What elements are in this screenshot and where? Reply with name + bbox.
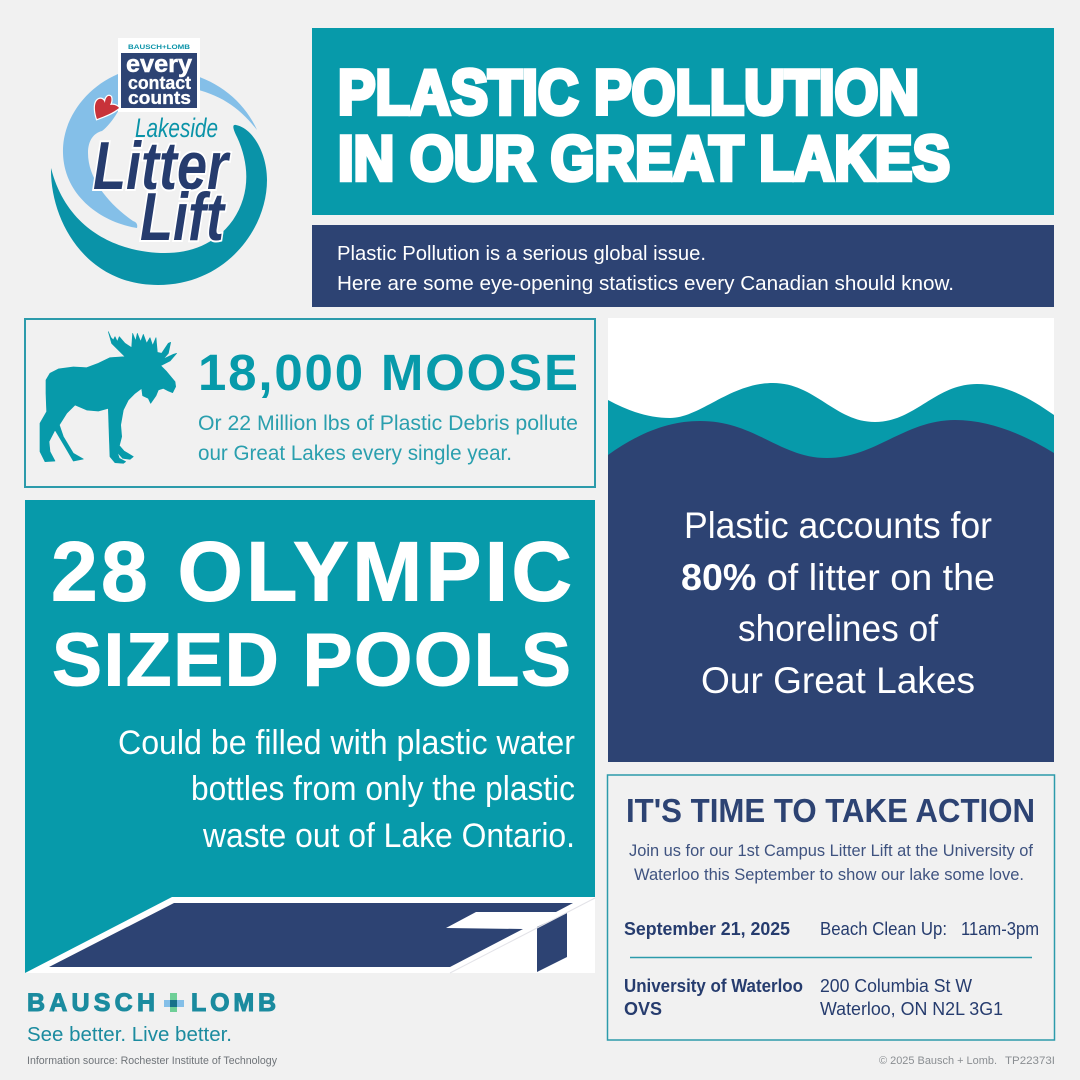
pools description: Could be filled with plastic water: [118, 724, 575, 762]
action description: Join us for our 1st Campus Litter Lift at the University of: [629, 842, 1033, 860]
tagline: See better. Live better.: [27, 1024, 232, 1046]
panel: shoreline litter statistic: [608, 318, 1054, 762]
title: IN OUR GREAT LAKES: [338, 124, 950, 194]
logo sponsor badge: contact: [128, 73, 191, 93]
moose description: Or 22 Million lbs of Plastic Debris pollute: [198, 412, 578, 435]
subtitle text: Here are some eye-opening statistics every Canadian should know.: [337, 273, 954, 295]
shoreline statistic text: shorelines of: [738, 608, 939, 649]
action description: [629, 842, 1033, 884]
logo light blue swoosh: [63, 74, 257, 228]
event date and time: [624, 919, 1039, 939]
moose description: our Great Lakes every single year.: [198, 442, 512, 465]
teal wave: [608, 383, 1054, 470]
event location: OVS: [624, 999, 662, 1019]
shoreline statistic text: 80% of litter on the: [681, 557, 995, 598]
logo sponsor badge: BAUSCH+LOMB: [128, 44, 190, 51]
subtitle panel: [312, 225, 1054, 307]
event date and time: September 21, 2025: [624, 919, 790, 939]
copyright: © 2025 Bausch + Lomb.: [879, 1055, 997, 1067]
title: PLASTIC POLLUTION: [338, 58, 919, 128]
logo teal swoosh: [51, 125, 267, 285]
shoreline statistic text: Our Great Lakes: [701, 660, 975, 701]
pools heading: 28 OLYMPIC: [51, 524, 572, 618]
brand logo: Bausch + Lomb: [27, 989, 276, 1017]
copyright: TP22373I: [1005, 1055, 1055, 1067]
logo word Litter: Litter: [93, 128, 231, 204]
logo: Lakeside Litter Lift: [51, 38, 267, 285]
icon: swimming pool: [25, 897, 595, 973]
event date and time: Beach Clean Up:: [820, 919, 947, 939]
shoreline statistic text: Plastic accounts for: [684, 505, 992, 546]
subtitle text: Plastic Pollution is a serious global issue.: [337, 243, 706, 265]
pools heading: [51, 524, 572, 702]
event date and time: 11am-3pm: [961, 919, 1039, 939]
moose heading: 18,000 MOOSE: [198, 344, 578, 401]
pools description: waste out of Lake Ontario.: [202, 817, 575, 855]
pools description: [118, 724, 575, 855]
panel: olympic pools statistic: [25, 500, 595, 973]
action heading: IT'S TIME TO TAKE ACTION: [626, 792, 1035, 829]
copyright: [879, 1055, 1055, 1067]
event location: 200 Columbia St W: [820, 976, 972, 996]
title panel: [312, 28, 1054, 215]
event location: Waterloo, ON N2L 3G1: [820, 999, 1003, 1019]
pools description: bottles from only the plastic: [191, 770, 575, 808]
icon: moose: [40, 332, 177, 463]
information source: Information source: Rochester Institute of Technology: [27, 1055, 277, 1067]
logo sponsor badge: counts: [128, 88, 191, 108]
panel: call to action: [608, 775, 1054, 1040]
panel: moose statistic: [25, 319, 595, 487]
logo sponsor badge: [118, 38, 200, 112]
brand logo: Bausch + Lomb: LOMB: [191, 989, 276, 1017]
navy wave panel: [608, 420, 1054, 762]
moose description: [198, 412, 578, 465]
logo word Lift: Lift: [140, 179, 226, 255]
event location: University of Waterloo: [624, 976, 803, 996]
subtitle text: [337, 243, 954, 295]
pools heading: SIZED POOLS: [52, 618, 571, 702]
event location: [624, 976, 1003, 1019]
action description: Waterloo this September to show our lake some love.: [634, 866, 1024, 884]
logo heart: [95, 96, 119, 119]
title: [338, 58, 950, 194]
logo word Lakeside: Lakeside: [135, 113, 218, 143]
logo sponsor badge: every: [126, 51, 193, 78]
shoreline statistic text: [681, 505, 995, 701]
brand logo: Bausch + Lomb: BAUSCH: [27, 989, 155, 1017]
